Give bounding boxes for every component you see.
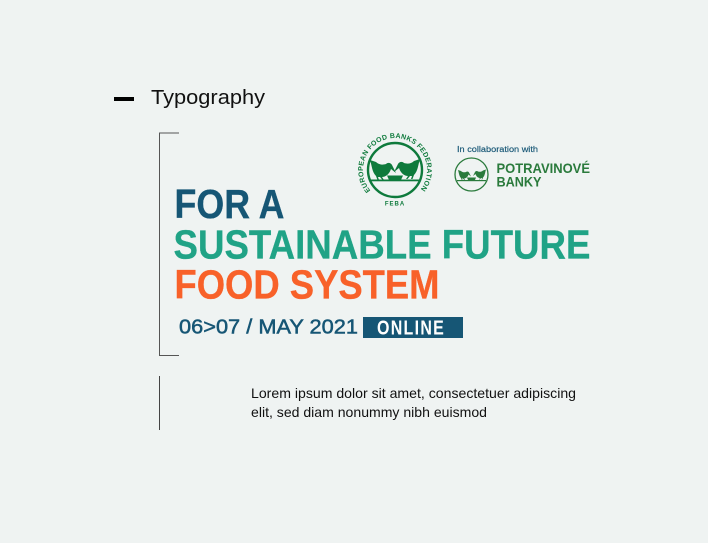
section heading: Typography: [151, 87, 265, 109]
Potravinove Banky logo: BANKY: [496, 174, 542, 190]
bracket around title: [160, 133, 179, 356]
body text: Lorem ipsum dolor sit amet, consectetuer adipiscing: [251, 385, 576, 401]
text block rule: [159, 376, 160, 430]
FEBA logo: FEBA: [385, 202, 405, 208]
Potravinove Banky logo: POTRAVINOVÉ: [496, 160, 590, 176]
date: 06>07 / MAY 2021: [179, 316, 358, 338]
title line 2: SUSTAINABLE FUTURE: [174, 222, 590, 268]
online badge: ONLINE: [377, 317, 445, 339]
body text: [251, 385, 576, 420]
Potravinove Banky logo: [455, 158, 590, 191]
section dash: [114, 97, 134, 101]
online badge: [363, 317, 463, 339]
collaboration label: In collaboration with: [457, 145, 538, 154]
body text: elit, sed diam nonummy nibh euismod: [251, 404, 487, 420]
title line 3: FOOD SYSTEM: [174, 262, 440, 308]
FEBA logo: EUROPEAN FOOD BANKS FEDERATION: [358, 133, 432, 194]
title line 1: FOR A: [174, 181, 284, 227]
